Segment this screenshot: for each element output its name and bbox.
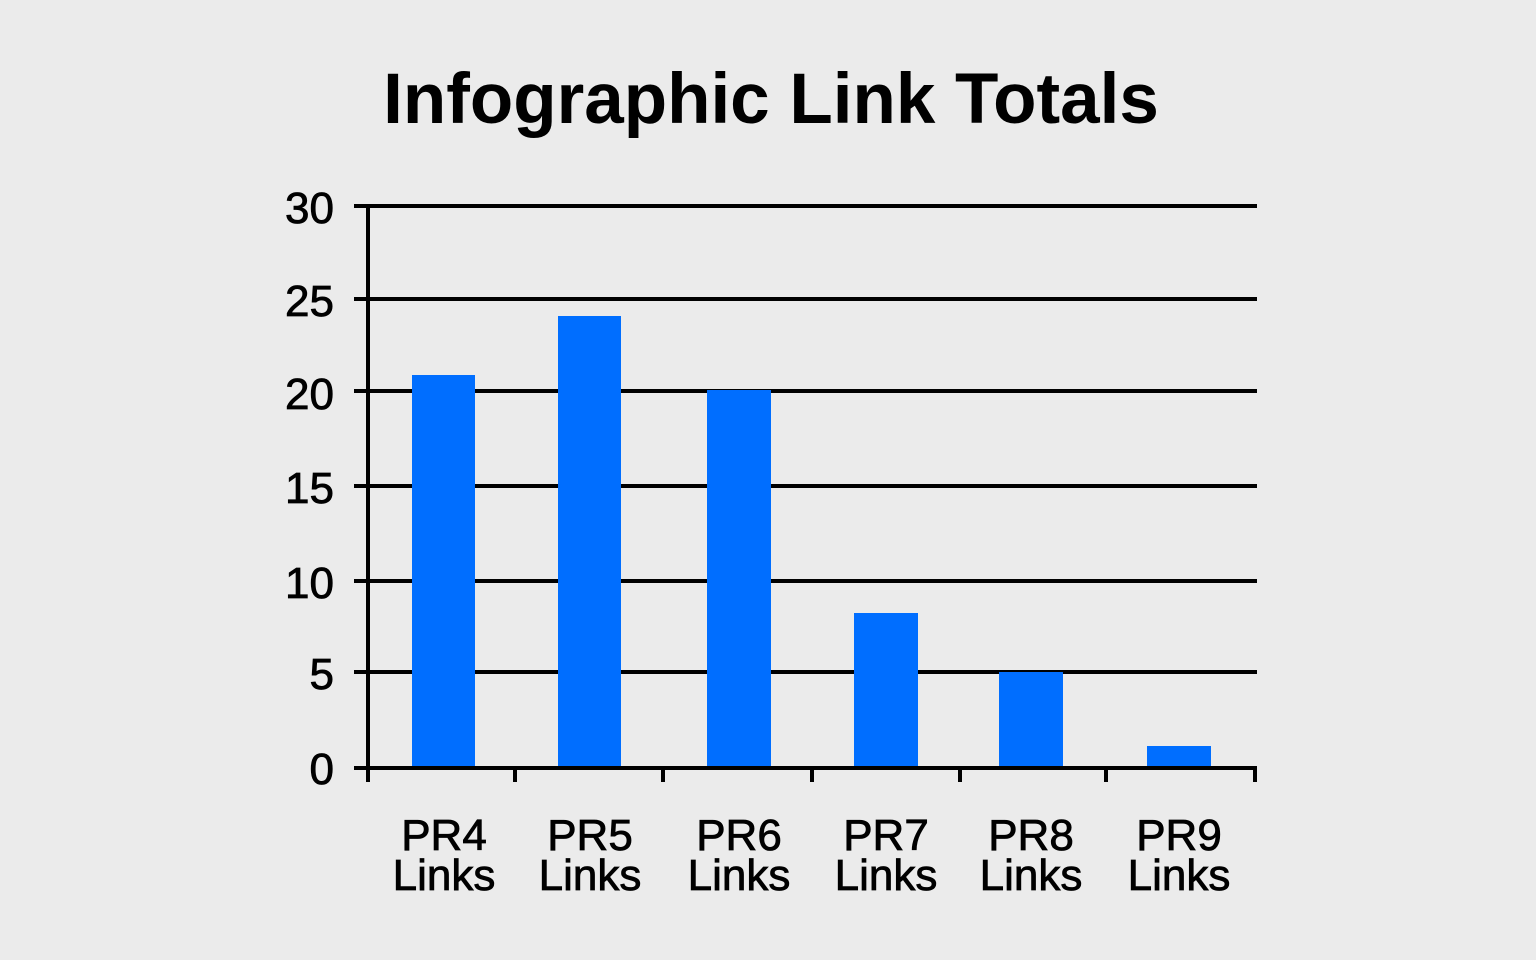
x-axis labels: PR9 bbox=[1136, 811, 1222, 860]
y-axis labels: 5 bbox=[310, 650, 334, 699]
y-axis labels: 25 bbox=[285, 277, 334, 326]
y-axis labels: 10 bbox=[285, 559, 334, 608]
x-axis labels: Links bbox=[539, 851, 641, 900]
x-axis labels: Links bbox=[393, 851, 495, 900]
y-axis labels bbox=[285, 184, 334, 794]
x-axis labels: Links bbox=[688, 851, 790, 900]
axes bbox=[354, 206, 1257, 782]
y-axis labels: 30 bbox=[285, 184, 334, 233]
x-axis labels: Links bbox=[1128, 851, 1230, 900]
x-axis labels: Links bbox=[835, 851, 937, 900]
y-axis labels: 15 bbox=[285, 464, 334, 513]
x-axis labels: PR5 bbox=[547, 811, 633, 860]
x-axis labels bbox=[393, 811, 1230, 900]
title: Infographic Link Totals bbox=[383, 60, 1159, 139]
y-axis labels: 0 bbox=[310, 745, 334, 794]
x-axis labels: PR6 bbox=[696, 811, 782, 860]
x-axis labels: Links bbox=[980, 851, 1082, 900]
x-axis labels: PR7 bbox=[843, 811, 929, 860]
x-axis labels: PR8 bbox=[988, 811, 1074, 860]
x-axis labels: PR4 bbox=[401, 811, 487, 860]
y-axis labels: 20 bbox=[285, 370, 334, 419]
bars bbox=[412, 316, 1211, 768]
gridlines bbox=[354, 206, 1257, 672]
